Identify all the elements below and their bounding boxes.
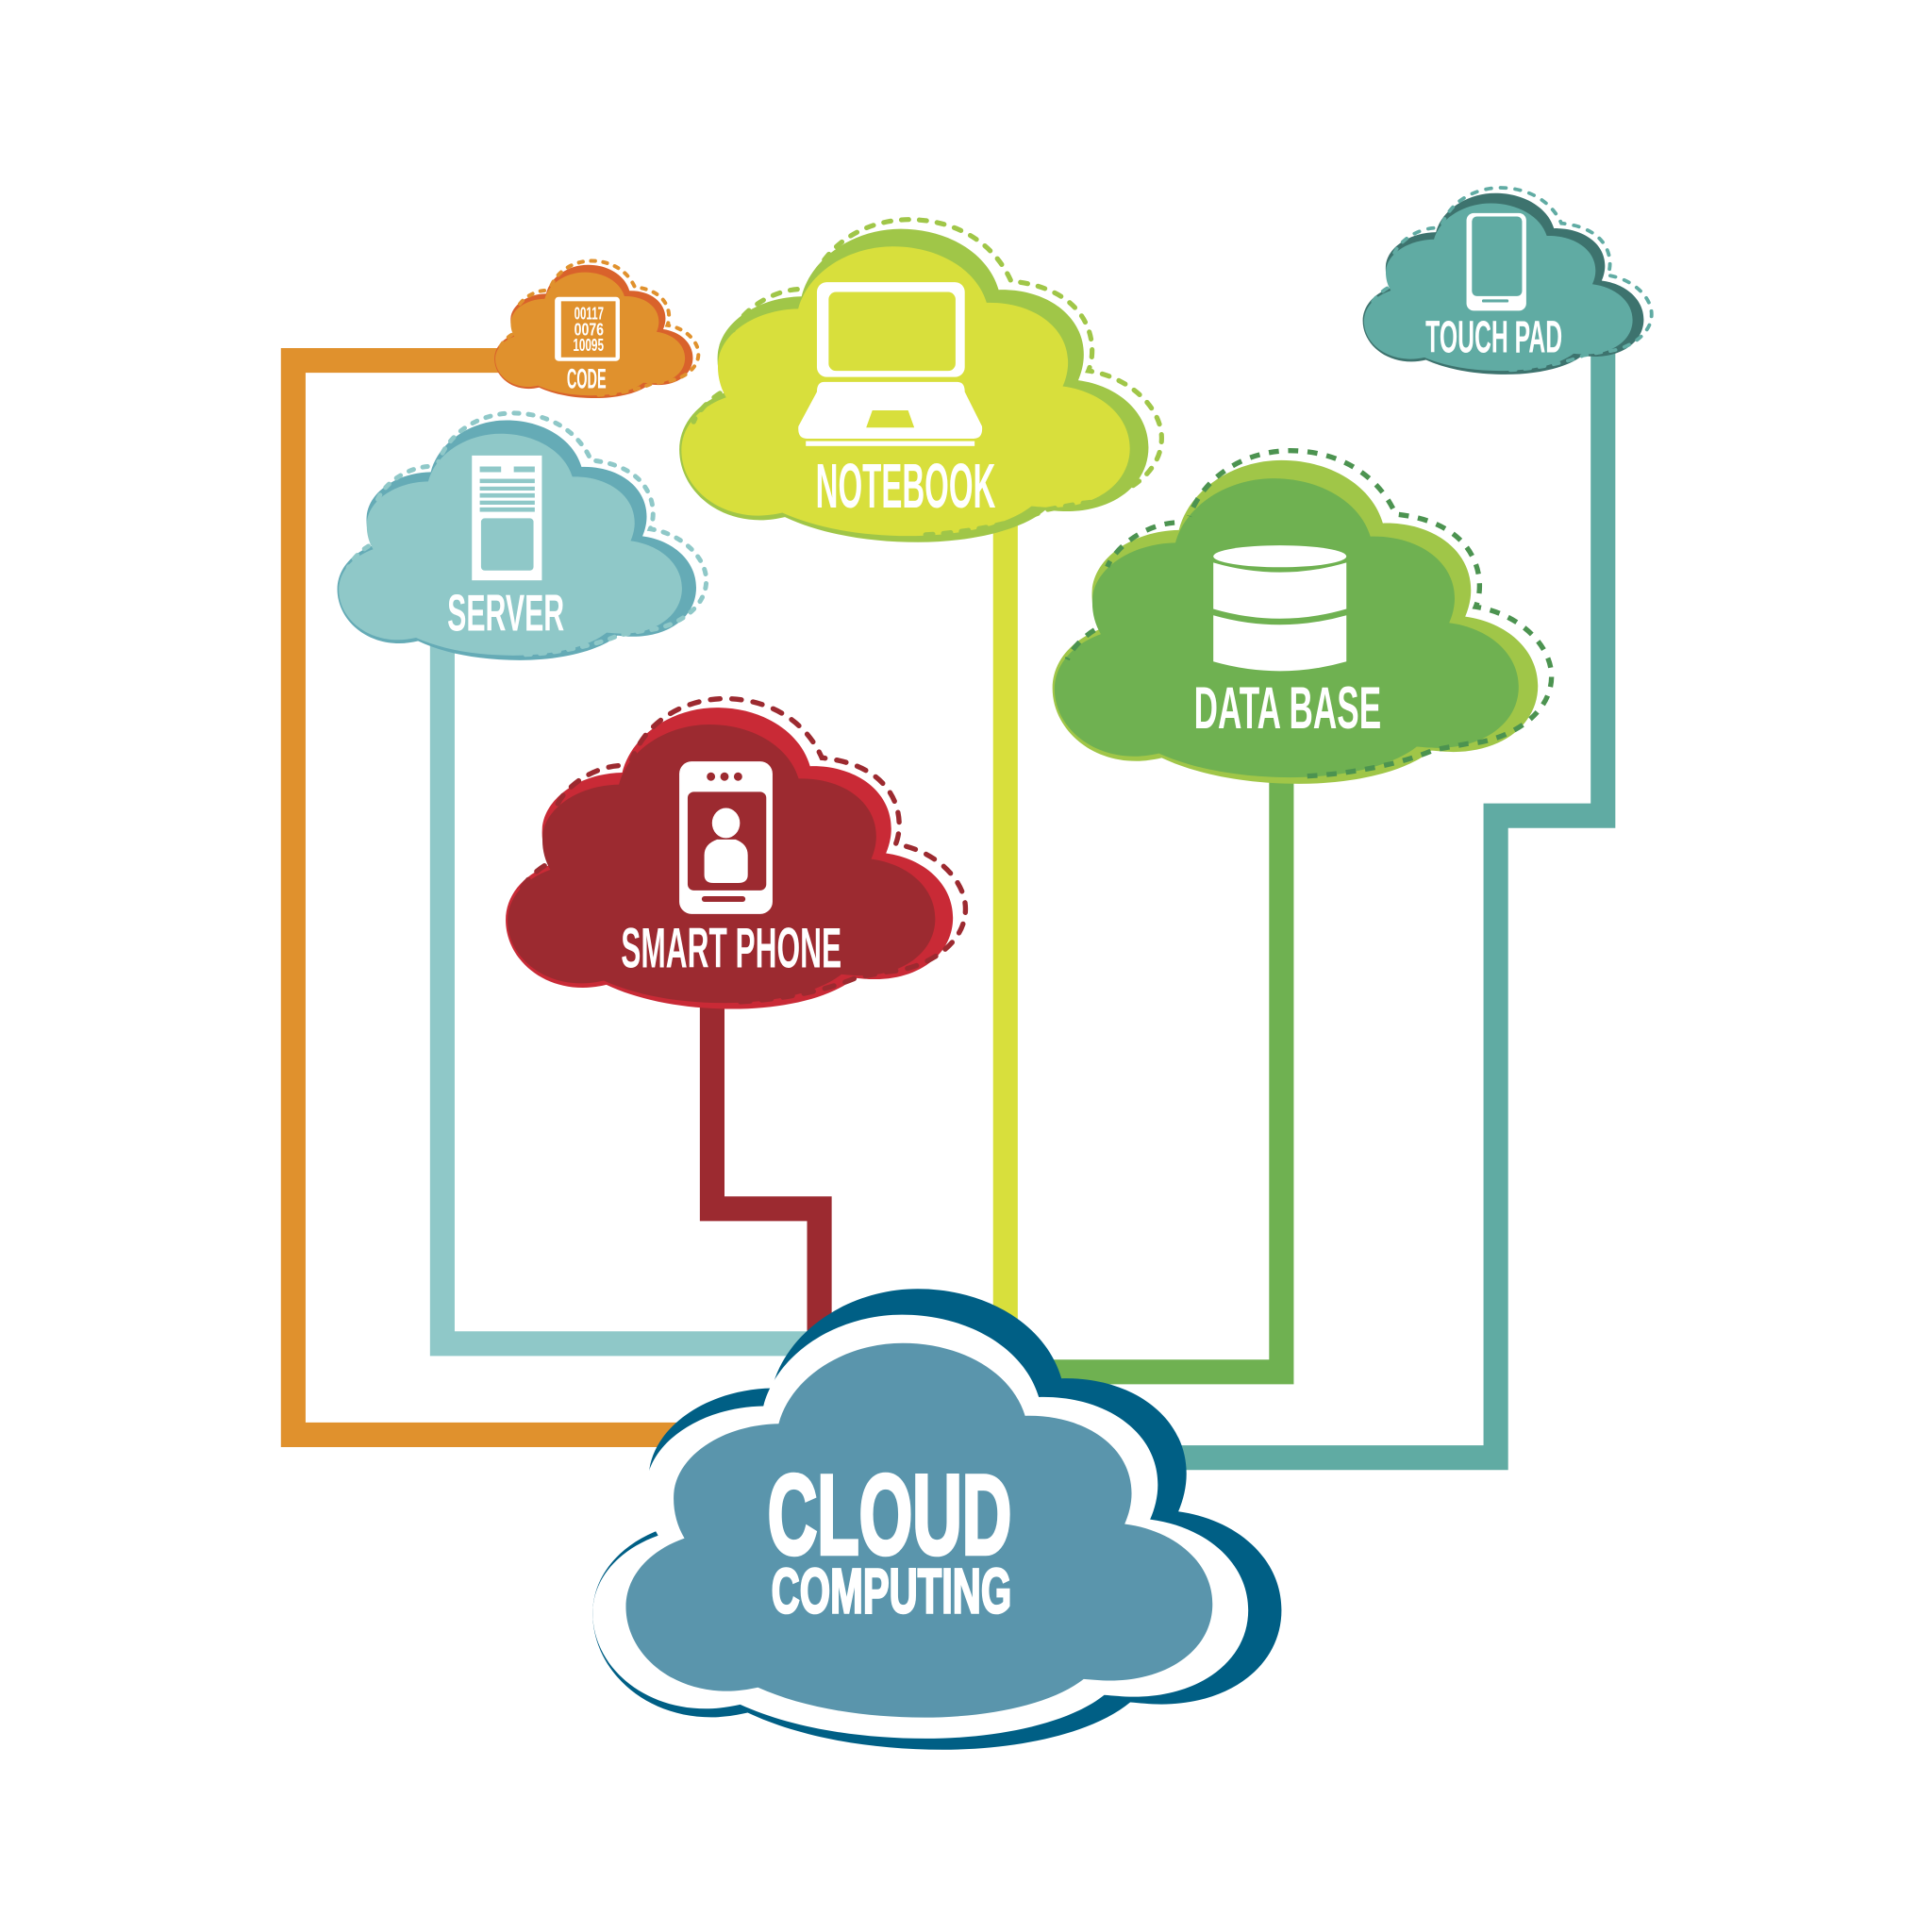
connector: smart phone to cloud computing — [712, 986, 820, 1349]
icon: touch pad device — [1467, 213, 1526, 310]
panel: central cloud computing cloud — [592, 1289, 1281, 1750]
label: data base: DATA BASE — [1194, 675, 1381, 741]
icon: smart phone with contact — [679, 761, 773, 914]
connector: data base to cloud computing — [1023, 764, 1281, 1372]
icon: binary code screen: 00117 — [575, 303, 604, 323]
cloud shape: smart phone — [506, 699, 965, 1009]
cloud shape: cloud computing — [592, 1289, 1281, 1750]
label: server: SERVER — [447, 584, 564, 642]
cloud shape: data base — [1053, 451, 1552, 784]
connector: touch pad to cloud computing — [1158, 345, 1603, 1457]
panel: notebook cloud — [679, 220, 1161, 542]
cloud shape: touch pad — [1363, 188, 1652, 375]
icon: laptop — [798, 282, 982, 446]
title: cloud: CLOUD — [768, 1452, 1011, 1578]
cloud shape: server — [338, 413, 707, 660]
panel: smart phone cloud — [506, 699, 965, 1009]
icon: binary code screen: 10095 — [573, 335, 604, 355]
panel: code cloud: CODE — [567, 363, 607, 394]
connector: notebook to cloud computing — [996, 518, 1015, 1349]
panel: notebook cloud: NOTEBOOK — [816, 452, 995, 522]
icon: binary code screen: 0076 — [575, 319, 604, 339]
panel: server cloud — [338, 413, 707, 660]
icon: server tower — [472, 456, 541, 580]
icon: database cylinder — [1213, 545, 1346, 671]
cloud shape: code — [494, 261, 698, 398]
connector: server to cloud computing — [442, 635, 825, 1343]
icon: binary code screen — [555, 297, 620, 361]
panel: data base cloud — [1053, 451, 1552, 784]
connector: code to cloud computing — [293, 360, 690, 1435]
title: computing: COMPUTING — [772, 1557, 1011, 1627]
panel: touch pad cloud — [1363, 188, 1652, 375]
panel: code cloud — [494, 261, 698, 398]
cloud shape: notebook — [679, 220, 1161, 542]
label: touch pad: TOUCH PAD — [1425, 312, 1562, 363]
label: smart phone: SMART PHONE — [621, 916, 841, 979]
